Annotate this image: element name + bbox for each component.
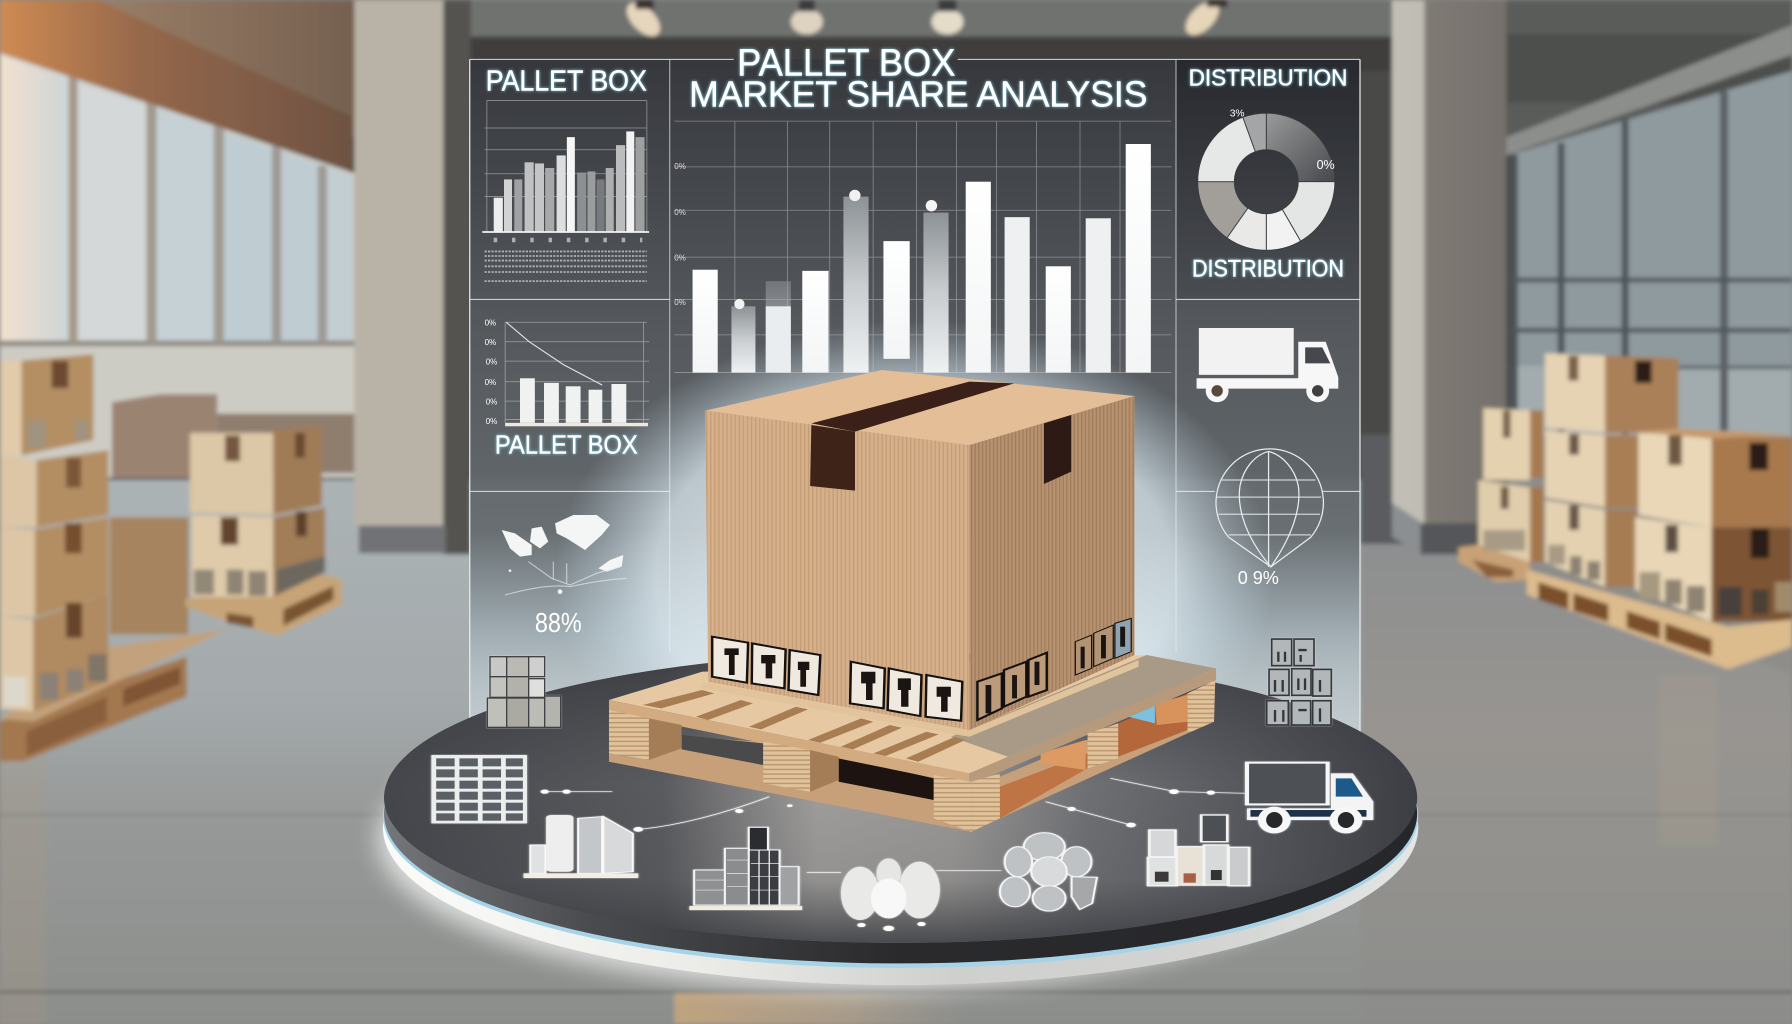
main title: MARKET SHARE ANALYSIS — [689, 73, 1147, 114]
icon: hex cluster — [1000, 833, 1097, 911]
icon: world map — [502, 515, 627, 595]
blue accent line — [383, 664, 1418, 968]
donut percentage labels — [1230, 109, 1335, 172]
icon: warehouse rack — [431, 755, 527, 823]
back furniture blur — [112, 394, 354, 478]
left middle combo chart: 0% — [485, 319, 496, 328]
back stack — [1458, 408, 1543, 582]
pallet top deck — [609, 655, 1216, 773]
icon: mixed boxes — [1148, 815, 1249, 886]
cardboard box on pallet — [609, 370, 1216, 832]
distribution heading bottom: DISTRIBUTION — [1192, 256, 1344, 283]
main title: PALLET BOX — [737, 41, 955, 83]
main bar chart: 0% — [674, 208, 686, 217]
left middle combo chart: 0% — [486, 417, 497, 426]
donut chart — [1198, 113, 1335, 250]
pallet slats — [643, 690, 965, 762]
icon: circles cluster — [841, 858, 940, 931]
regional share percentage: 88% — [535, 607, 582, 638]
left middle combo chart: 0% — [486, 398, 497, 407]
left middle label: PALLET BOX — [495, 430, 638, 460]
holographic dashboard panel — [470, 41, 1360, 834]
distribution heading top: DISTRIBUTION — [1189, 65, 1347, 91]
packing tape — [810, 382, 1071, 491]
inner underside — [609, 697, 1188, 832]
circular platform — [383, 653, 1418, 985]
box base shadow lip — [702, 660, 1139, 737]
dark side band — [384, 664, 1417, 963]
main bar chart — [674, 121, 1171, 373]
left middle combo chart: 0% — [485, 338, 496, 347]
left pillar — [354, 0, 471, 554]
floor — [0, 434, 1792, 1024]
right pillar — [1392, 0, 1506, 554]
centre stack — [1545, 353, 1678, 587]
outer silver rim — [383, 670, 1418, 985]
right cardboard stacks — [1458, 353, 1792, 669]
platform icons — [431, 755, 1373, 931]
donut percentage labels: 0% — [1317, 158, 1335, 172]
right windows — [1506, 25, 1792, 440]
left middle combo chart: 0% — [485, 378, 496, 387]
left box stack — [0, 354, 227, 761]
icon: stacked crates right — [1267, 639, 1331, 725]
top surface — [384, 653, 1417, 943]
left middle combo chart: 0% — [486, 358, 497, 367]
glass background — [470, 59, 1360, 834]
box top face — [705, 370, 1134, 445]
handling stickers — [712, 618, 1131, 721]
left roof beam — [0, 0, 352, 171]
globe percentage: 0 9% — [1238, 567, 1279, 588]
main bar chart: 0% — [674, 254, 686, 263]
icon: factory building — [689, 827, 802, 910]
floor glow around platform — [377, 689, 1349, 991]
left cardboard stacks — [0, 354, 342, 761]
main bar chart: 0% — [674, 298, 686, 307]
network connectors — [541, 778, 1247, 872]
left top bar chart — [482, 101, 649, 281]
box front face — [705, 411, 969, 730]
icon: wireframe globe — [1216, 449, 1323, 567]
left top title: PALLET BOX — [486, 65, 647, 97]
icon: platform truck — [1247, 763, 1373, 833]
box right face — [969, 396, 1134, 730]
left windows — [0, 53, 357, 478]
wooden pallet — [609, 655, 1216, 832]
ceiling lights — [621, 0, 1227, 42]
donut percentage labels: 3% — [1230, 109, 1245, 120]
left middle combo chart — [485, 319, 649, 426]
front stack — [1635, 429, 1792, 622]
icon: stacked crates left — [487, 657, 561, 727]
icon: delivery truck — [1197, 328, 1338, 402]
ceiling — [0, 0, 1792, 143]
right pallet — [1527, 570, 1792, 669]
mid box stack — [185, 425, 342, 636]
sticker glyphs — [724, 627, 1125, 713]
icon: package blocks — [524, 815, 638, 878]
main bar chart: 0% — [674, 162, 686, 171]
main title — [689, 41, 1147, 114]
pallet blocks — [609, 680, 1215, 832]
